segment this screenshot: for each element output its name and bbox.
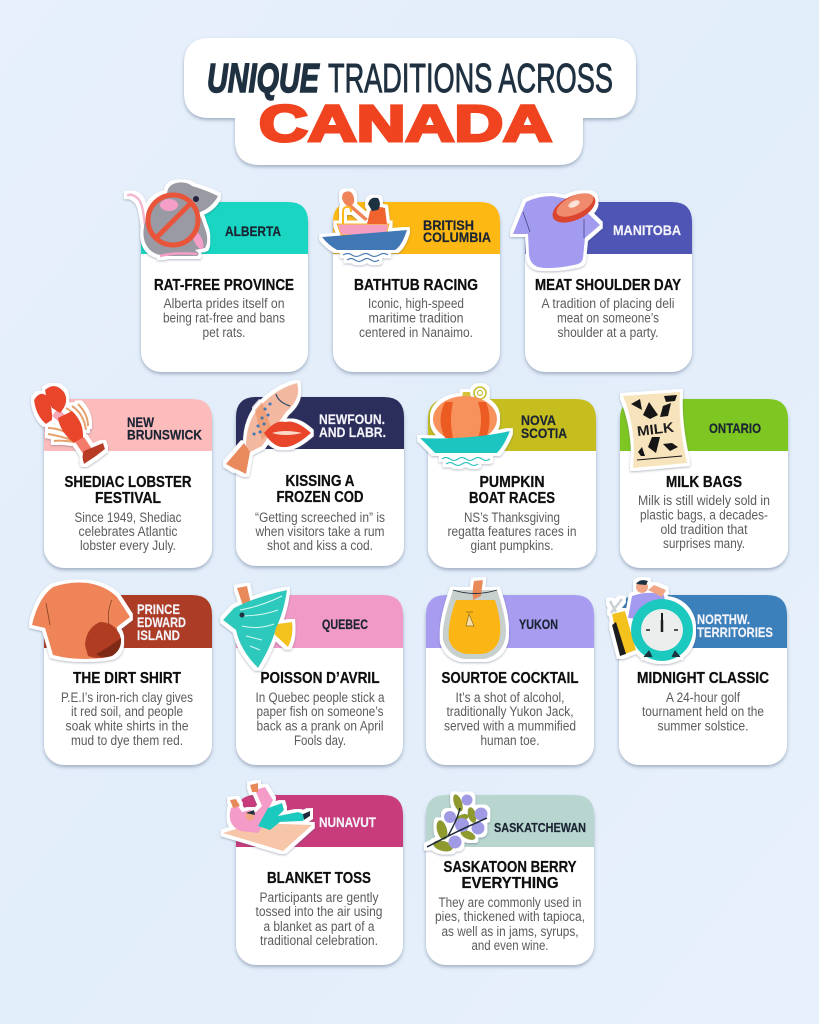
province label: MANITOBA [613,222,681,238]
card heading: EVERYTHING [462,875,558,892]
province label: ALBERTA [225,223,281,239]
card heading: THE DIRT SHIRT [73,670,181,687]
province label: BRITISH [423,217,474,233]
province label [423,217,491,245]
card heading: FROZEN COD [276,489,364,506]
icon: lobster [34,386,105,464]
panel: Prince Edward Island [32,582,212,765]
header band [44,595,212,648]
card heading: SHEDIAC LOBSTER [64,474,192,491]
card description: Since 1949, Shediac [74,510,182,525]
card heading: BATHTUB RACING [354,277,478,294]
card description [542,296,674,340]
card description: paper fish on someone’s [256,704,384,719]
panel: Alberta [128,182,308,372]
header band [619,595,787,648]
panel: Newfoundland and Labrador [226,383,404,566]
card heading: SASKATOON BERRY [444,859,577,876]
card description [638,493,770,551]
header band [525,202,692,254]
card body [525,202,692,372]
panel: Nova Scotia [420,387,596,568]
province label: NEW [127,414,155,430]
card heading: BLANKET TOSS [267,870,371,887]
card heading: POISSON D’AVRIL [260,670,380,687]
title line two: CANADA [259,95,552,152]
card description [256,890,382,948]
card heading: PUMPKIN [480,474,544,491]
card description: Fools day. [294,733,346,748]
card description: soak white shirts in the [66,718,188,734]
province label: NEWFOUN. [319,411,385,427]
card description [642,690,764,734]
card description: shot and kiss a cod. [267,538,373,553]
card description: when visitors take a rum [255,524,384,539]
card description: Iconic, high-speed [368,296,464,311]
card heading: MEAT SHOULDER DAY [535,277,681,294]
card description: pet rats. [202,325,246,340]
card description: celebrates Atlantic [78,524,178,539]
header band [620,399,788,451]
province label: ONTARIO [709,420,761,436]
card heading: SOURTOE COCKTAIL [442,670,579,687]
icon: sourtoe cocktail [443,580,506,659]
icon: shirt with meat [513,187,600,268]
province label: YUKON [519,616,558,632]
card description: surprises many. [663,536,745,551]
header band [426,595,594,648]
card description: back as a prank on April [256,718,384,734]
card heading: MIDNIGHT CLASSIC [637,670,769,687]
card description [61,690,193,748]
panel: Yukon [426,580,594,765]
card heading [469,474,555,507]
card description: summer solstice. [658,718,748,734]
header band [333,202,500,254]
card description: being rat-free and bans [163,310,285,326]
card description: “Getting screeched in” is [255,510,385,525]
card description: A tradition of placing deli [542,296,674,311]
province label [697,611,773,640]
province label [137,601,186,643]
province label: ISLAND [137,627,180,643]
card heading [276,473,364,506]
province label [521,412,567,441]
card body [428,399,596,568]
header band [44,399,212,451]
card body [236,595,403,765]
card description: and even wine. [472,938,548,953]
icon: bathtub boat [322,191,407,262]
card description [444,690,576,748]
card description [359,296,473,340]
title line one: UNIQUE [207,55,320,101]
card body [236,397,404,566]
province label: EDWARD [137,614,186,630]
card heading [64,474,192,507]
card description: traditional celebration. [260,933,378,948]
card description: A 24-hour golf [666,690,740,705]
card heading: FESTIVAL [95,490,161,507]
card description [255,510,385,553]
card description [435,895,585,953]
card description: NS’s Thanksgiving [464,510,560,525]
card description: giant pumpkins. [470,538,554,553]
icon: blanket toss [223,783,312,851]
card description: They are commonly used in [438,895,582,910]
card body [426,595,594,765]
card body [620,399,788,568]
card description: regatta features races in [448,524,576,539]
card heading: BOAT RACES [469,490,555,507]
panel: Northwest Territories [610,580,787,765]
card body [426,795,594,965]
province label [319,411,386,440]
card heading: RAT-FREE PROVINCE [154,277,294,294]
title line one [207,55,613,101]
header band [236,397,404,449]
icon: pumpkin boat [420,387,510,466]
card heading [444,859,577,892]
panel: New Brunswick [34,386,212,568]
title backing [184,38,636,165]
icon: saskatoon berries [427,793,488,853]
card description: pies, thickened with tapioca, [435,909,585,924]
card description: meat on someone’s [557,310,659,326]
card description: plastic bags, a decades- [640,508,768,522]
header band [428,399,596,451]
icon: crossed-out rat [128,182,218,256]
card description [448,510,576,553]
icon: milk bag [623,392,687,468]
icon: dirt shirt [32,582,130,659]
card description: It’s a shot of alcohol, [456,690,564,705]
province label: NOVA [521,412,556,428]
panel: Manitoba [513,187,692,372]
province label: NORTHW. [697,611,750,627]
header band [236,795,403,847]
icon: milk bag: MILK [636,419,675,439]
province label: SASKATCHEWAN [494,820,586,835]
title line one: TRADITIONS ACROSS [328,55,613,101]
card description: tossed into the air using [256,904,382,919]
card body [141,202,308,372]
card description: a blanket as part of a [264,919,375,934]
card description: centered in Nanaimo. [359,325,473,340]
province label: BRUNSWICK [127,426,202,442]
card description [256,690,385,748]
card heading: KISSING A [286,473,355,490]
card description: Participants are gently [260,890,379,905]
card description: maritime tradition [368,310,464,326]
header band [141,202,308,254]
province label: NUNAVUT [319,814,376,830]
province label: TERRITORIES [697,624,773,640]
header band [426,795,594,847]
header band [236,595,403,648]
panel: Saskatchewan [426,793,594,965]
card description: mud to dye them red. [71,733,183,748]
panel: Ontario [620,392,788,568]
card description: tournament held on the [642,704,764,719]
card description: P.E.I’s iron-rich clay gives [61,690,193,705]
province label [127,414,202,442]
card body [333,202,500,372]
card description: In Quebec people stick a [256,690,385,705]
card description: old tradition that [660,522,748,537]
icon: paper fish [223,586,292,668]
card description: as well as in jams, syrups, [442,924,578,939]
card description [74,510,182,553]
card description: human toe. [480,733,540,748]
icon: cod and lips [226,383,311,474]
province label: AND LABR. [319,424,386,440]
card body [236,795,403,965]
card body [44,595,212,765]
province label: COLUMBIA [423,229,491,245]
province label: SCOTIA [521,425,567,441]
province label: QUEBEC [322,616,368,632]
card description: shoulder at a party. [558,325,658,340]
panel: British Columbia [322,191,500,372]
card heading: MILK BAGS [666,474,742,491]
card description: traditionally Yukon Jack, [446,704,574,719]
panel: Quebec [223,586,403,765]
card description: it red soil, and people [71,704,183,719]
panel: Nunavut [223,783,403,965]
card description [163,296,285,340]
card description: lobster every July. [80,538,176,553]
title sticker [184,38,636,165]
card description: Milk is still widely sold in [638,493,770,508]
card body [44,399,212,568]
icon: golfer and clock [610,580,693,661]
card body [619,595,787,765]
card description: Alberta prides itself on [164,296,284,311]
province label: PRINCE [137,601,180,617]
card description: served with a mummified [444,718,576,734]
